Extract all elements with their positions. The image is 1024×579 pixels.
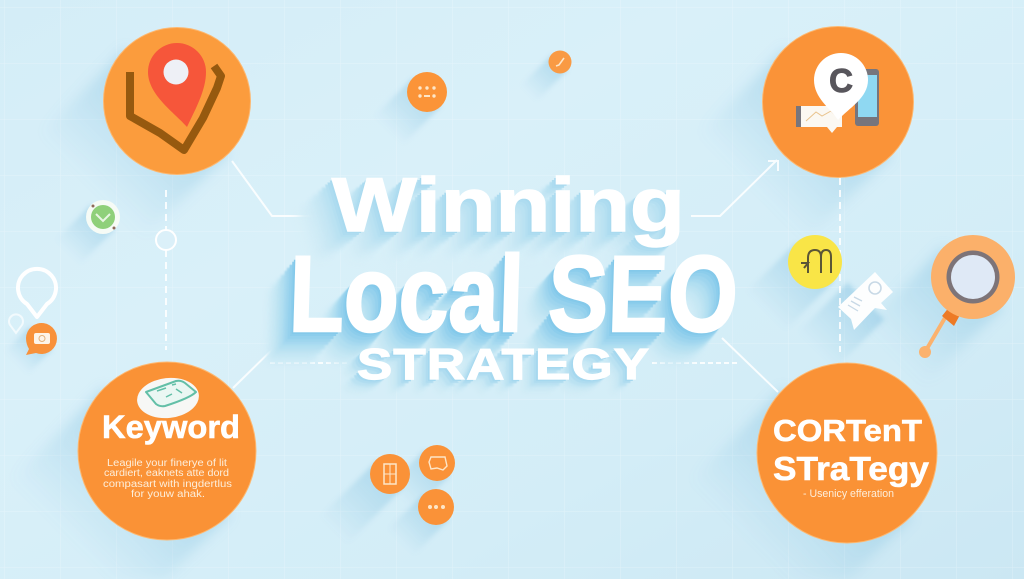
icon: phone bbox=[855, 69, 879, 126]
icon: keyboard key bbox=[135, 375, 201, 421]
icon: ticket card bbox=[838, 272, 893, 330]
icon: yellow badge bbox=[788, 235, 842, 289]
keyword body text bbox=[103, 458, 232, 500]
content caption: - Usenicy efferation bbox=[803, 488, 894, 500]
keyword body text: Leagile your finerye of lit bbox=[107, 458, 227, 469]
icon: ellipsis button bbox=[418, 489, 454, 525]
icon: large pin outline bbox=[18, 269, 56, 317]
icon: check button bbox=[548, 50, 572, 74]
pin hole bbox=[164, 60, 188, 84]
icon: small pin outline bbox=[9, 314, 23, 333]
pin letter: C bbox=[829, 62, 853, 99]
icon: green badge bbox=[86, 200, 120, 234]
icon: dots button bbox=[407, 72, 447, 112]
long shadows, small icons bbox=[5, 54, 884, 555]
title: Winning: Winning bbox=[332, 163, 685, 248]
keyword body text: for youw ahak. bbox=[131, 489, 205, 500]
heading: strategy: STraTegy bbox=[773, 450, 930, 487]
icon: ring marker bbox=[156, 230, 176, 250]
keyword body text: compasart with ingdertlus bbox=[103, 479, 232, 490]
icon: white pin bbox=[814, 53, 868, 120]
heading: Keyword: Keyword bbox=[102, 409, 240, 445]
title: Local SEO: Local SEO bbox=[288, 233, 740, 354]
icon: chat button bbox=[419, 445, 455, 481]
heading: content: CORTenT bbox=[773, 413, 922, 448]
panel: mobile circle bbox=[762, 26, 914, 178]
icon: chat chart bbox=[796, 106, 842, 133]
keyword body text: cardiert, eaknets atte dord bbox=[104, 468, 229, 479]
title: STRATEGY: STRATEGY bbox=[357, 340, 650, 389]
icon: location pin bbox=[148, 43, 206, 127]
icon: camera bubble bbox=[26, 323, 57, 355]
panel: keyword circle bbox=[78, 362, 256, 540]
icon: document button bbox=[370, 454, 410, 494]
connector lines bbox=[166, 160, 840, 392]
icon: folded map bbox=[130, 66, 221, 150]
icon: magnifying glass bbox=[919, 235, 1015, 358]
panel: content strategy circle bbox=[757, 363, 937, 543]
panel: map pin circle bbox=[104, 28, 250, 174]
